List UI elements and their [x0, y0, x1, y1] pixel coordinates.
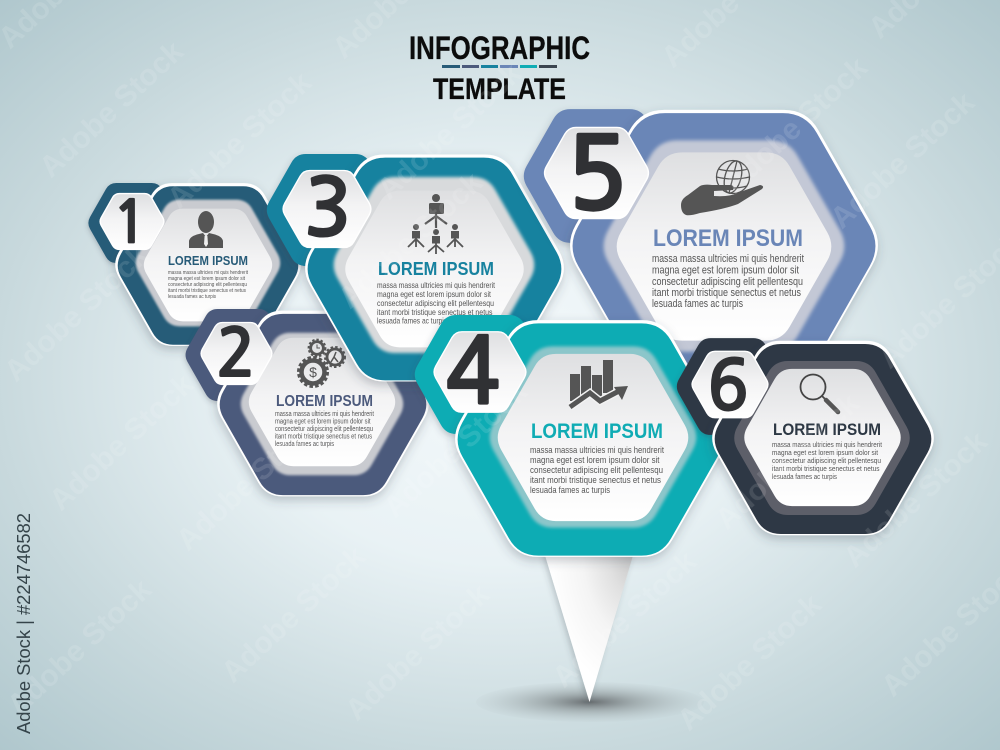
hexagon 2 frame [217, 311, 429, 496]
number badge 5: 5 [566, 126, 628, 226]
title [409, 30, 590, 106]
hexagon 5 frame [570, 110, 878, 380]
text block 3: massa massa ultricies mi quis hendrerit [377, 280, 496, 290]
text block 5: magna eget est lorem ipsum dolor sit [652, 264, 799, 276]
number badge 6 back [677, 338, 787, 435]
text block 4: itant morbi tristique senectus et netus [530, 475, 661, 486]
watermark: Adobe Stock [1, 573, 158, 722]
panel 5 [524, 109, 878, 380]
watermark: Adobe Stock [717, 51, 874, 200]
panel 2 [186, 309, 429, 496]
text block 4: consectetur adipiscing elit pellentesqu [530, 465, 663, 476]
watermark: Adobe Stock [377, 375, 534, 524]
icon: gears [298, 340, 345, 386]
text block 4: magna eget est lorem ipsum dolor sit [530, 455, 660, 466]
text block 2: magna eget est lorem ipsum dolor sit [275, 418, 371, 426]
title line two: TEMPLATE [433, 73, 566, 106]
hexagon 6 frame [712, 341, 934, 535]
number badge 3 back [267, 154, 394, 266]
pin shadow [476, 682, 704, 722]
panel 1 [88, 183, 301, 346]
text block 2: massa massa ultricies mi quis hendrerit [275, 411, 374, 418]
watermark: Adobe Stock [161, 66, 318, 215]
text block 6: itant morbi tristique senectus et netus [772, 464, 880, 473]
hexagon 3 frame [305, 154, 564, 382]
icon: bar chart with arrow [570, 360, 628, 407]
pin pointer [544, 552, 634, 702]
text block 3: consectetur adipiscing elit pellentesqu [377, 298, 494, 308]
text block 5: itant morbi tristique senectus et netus [652, 287, 801, 299]
panel 3 [267, 154, 564, 382]
hexagon 1 frame [115, 183, 301, 346]
number badge 1 back [88, 183, 180, 263]
heading 6: LOREM IPSUM [773, 420, 881, 439]
text block 1: itant morbi tristique senectus et netus [168, 288, 246, 294]
text block 3 [377, 280, 496, 326]
text block 5: lesuada fames ac turpis [652, 298, 743, 310]
heading 1: LOREM IPSUM [168, 253, 248, 268]
text block 4: massa massa ultricies mi quis hendrerit [530, 445, 664, 456]
title divider [442, 65, 557, 68]
watermark: Adobe Stock [339, 578, 496, 727]
text block 3: lesuada fames ac turpis [377, 316, 447, 326]
text block 5: consectetur adipiscing elit pellentesqu [652, 276, 803, 288]
number badge 5 [544, 126, 649, 226]
text block 6: lesuada fames ac turpis [772, 472, 837, 481]
heading 2: LOREM IPSUM [276, 393, 373, 410]
text block 6: consectetur adipiscing elit pellentesqu [772, 456, 881, 465]
text block 2: lesuada fames ac turpis [275, 441, 334, 448]
title line one: INFOGRAPHIC [409, 30, 590, 66]
watermark: Adobe Stock [546, 545, 703, 694]
stock id side label: Adobe Stock | #224746582 [14, 513, 34, 734]
text block 1 [168, 270, 248, 300]
watermark: Adobe Stock [215, 540, 372, 689]
watermark: Adobe Stock [837, 425, 994, 574]
number badge 2 back [186, 309, 290, 401]
number badge 2: 2 [216, 320, 256, 386]
text block 3: magna eget est lorem ipsum dolor sit [377, 289, 492, 299]
watermark: Adobe Stock [43, 368, 200, 517]
watermark: Adobe Stock [332, 166, 489, 315]
hexagon 4 frame [455, 320, 725, 557]
number badge 6 [691, 351, 769, 421]
number badge 3 [282, 169, 372, 248]
heading 3: LOREM IPSUM [378, 258, 494, 279]
text block 5 [652, 253, 804, 310]
text block 2: itant morbi tristique senectus et netus [275, 434, 372, 440]
number badge 4 [433, 327, 527, 418]
text block 2: consectetur adipiscing elit pellentesqu [275, 426, 373, 433]
panel 4 [415, 315, 725, 557]
number badge 6: 6 [707, 353, 749, 421]
watermark: Adobe Stock [0, 239, 155, 388]
text block 1: lesuada fames ac turpis [168, 294, 216, 300]
icon: businessman [189, 211, 223, 248]
number badge 4 back [415, 315, 550, 434]
watermark: Adobe Stock [170, 408, 327, 557]
text block 5: massa massa ultricies mi quis hendrerit [652, 253, 804, 265]
watermark: Adobe Stock [824, 86, 981, 235]
number badge 1 [99, 193, 165, 252]
number badge 2 [200, 320, 273, 386]
panel 6 [677, 338, 934, 535]
heading 4: LOREM IPSUM [531, 420, 663, 443]
text block 4: lesuada fames ac turpis [530, 485, 610, 496]
number badge 4: 4 [445, 327, 501, 418]
text block 2 [275, 411, 374, 448]
watermark: Adobe Stock [33, 35, 190, 184]
icon: organization chart [408, 194, 463, 254]
heading 5: LOREM IPSUM [653, 225, 803, 252]
text block 1: consectetur adipiscing elit pellentesqu [168, 282, 247, 288]
text block 1: massa massa ultricies mi quis hendrerit [168, 270, 248, 276]
icon: hand holding globe [681, 159, 763, 215]
text block 3: itant morbi tristique senectus et netus [377, 307, 492, 317]
text block 6: magna eget est lorem ipsum dolor sit [772, 448, 879, 457]
number badge 5 back [524, 109, 676, 243]
text block 4 [530, 445, 664, 496]
watermark: Adobe Stock [709, 387, 866, 536]
icon: magnifying glass [800, 374, 838, 412]
icon: gears: $ [309, 364, 317, 380]
watermark: Adobe Stock [671, 588, 828, 737]
text block 1: magna eget est lorem ipsum dolor sit [168, 276, 245, 282]
text block 6: massa massa ultricies mi quis hendrerit [772, 440, 883, 449]
number badge 1: 1 [112, 193, 148, 252]
text block 6 [772, 440, 883, 481]
number badge 3: 3 [304, 169, 352, 248]
watermark: Adobe Stock [371, 57, 528, 206]
